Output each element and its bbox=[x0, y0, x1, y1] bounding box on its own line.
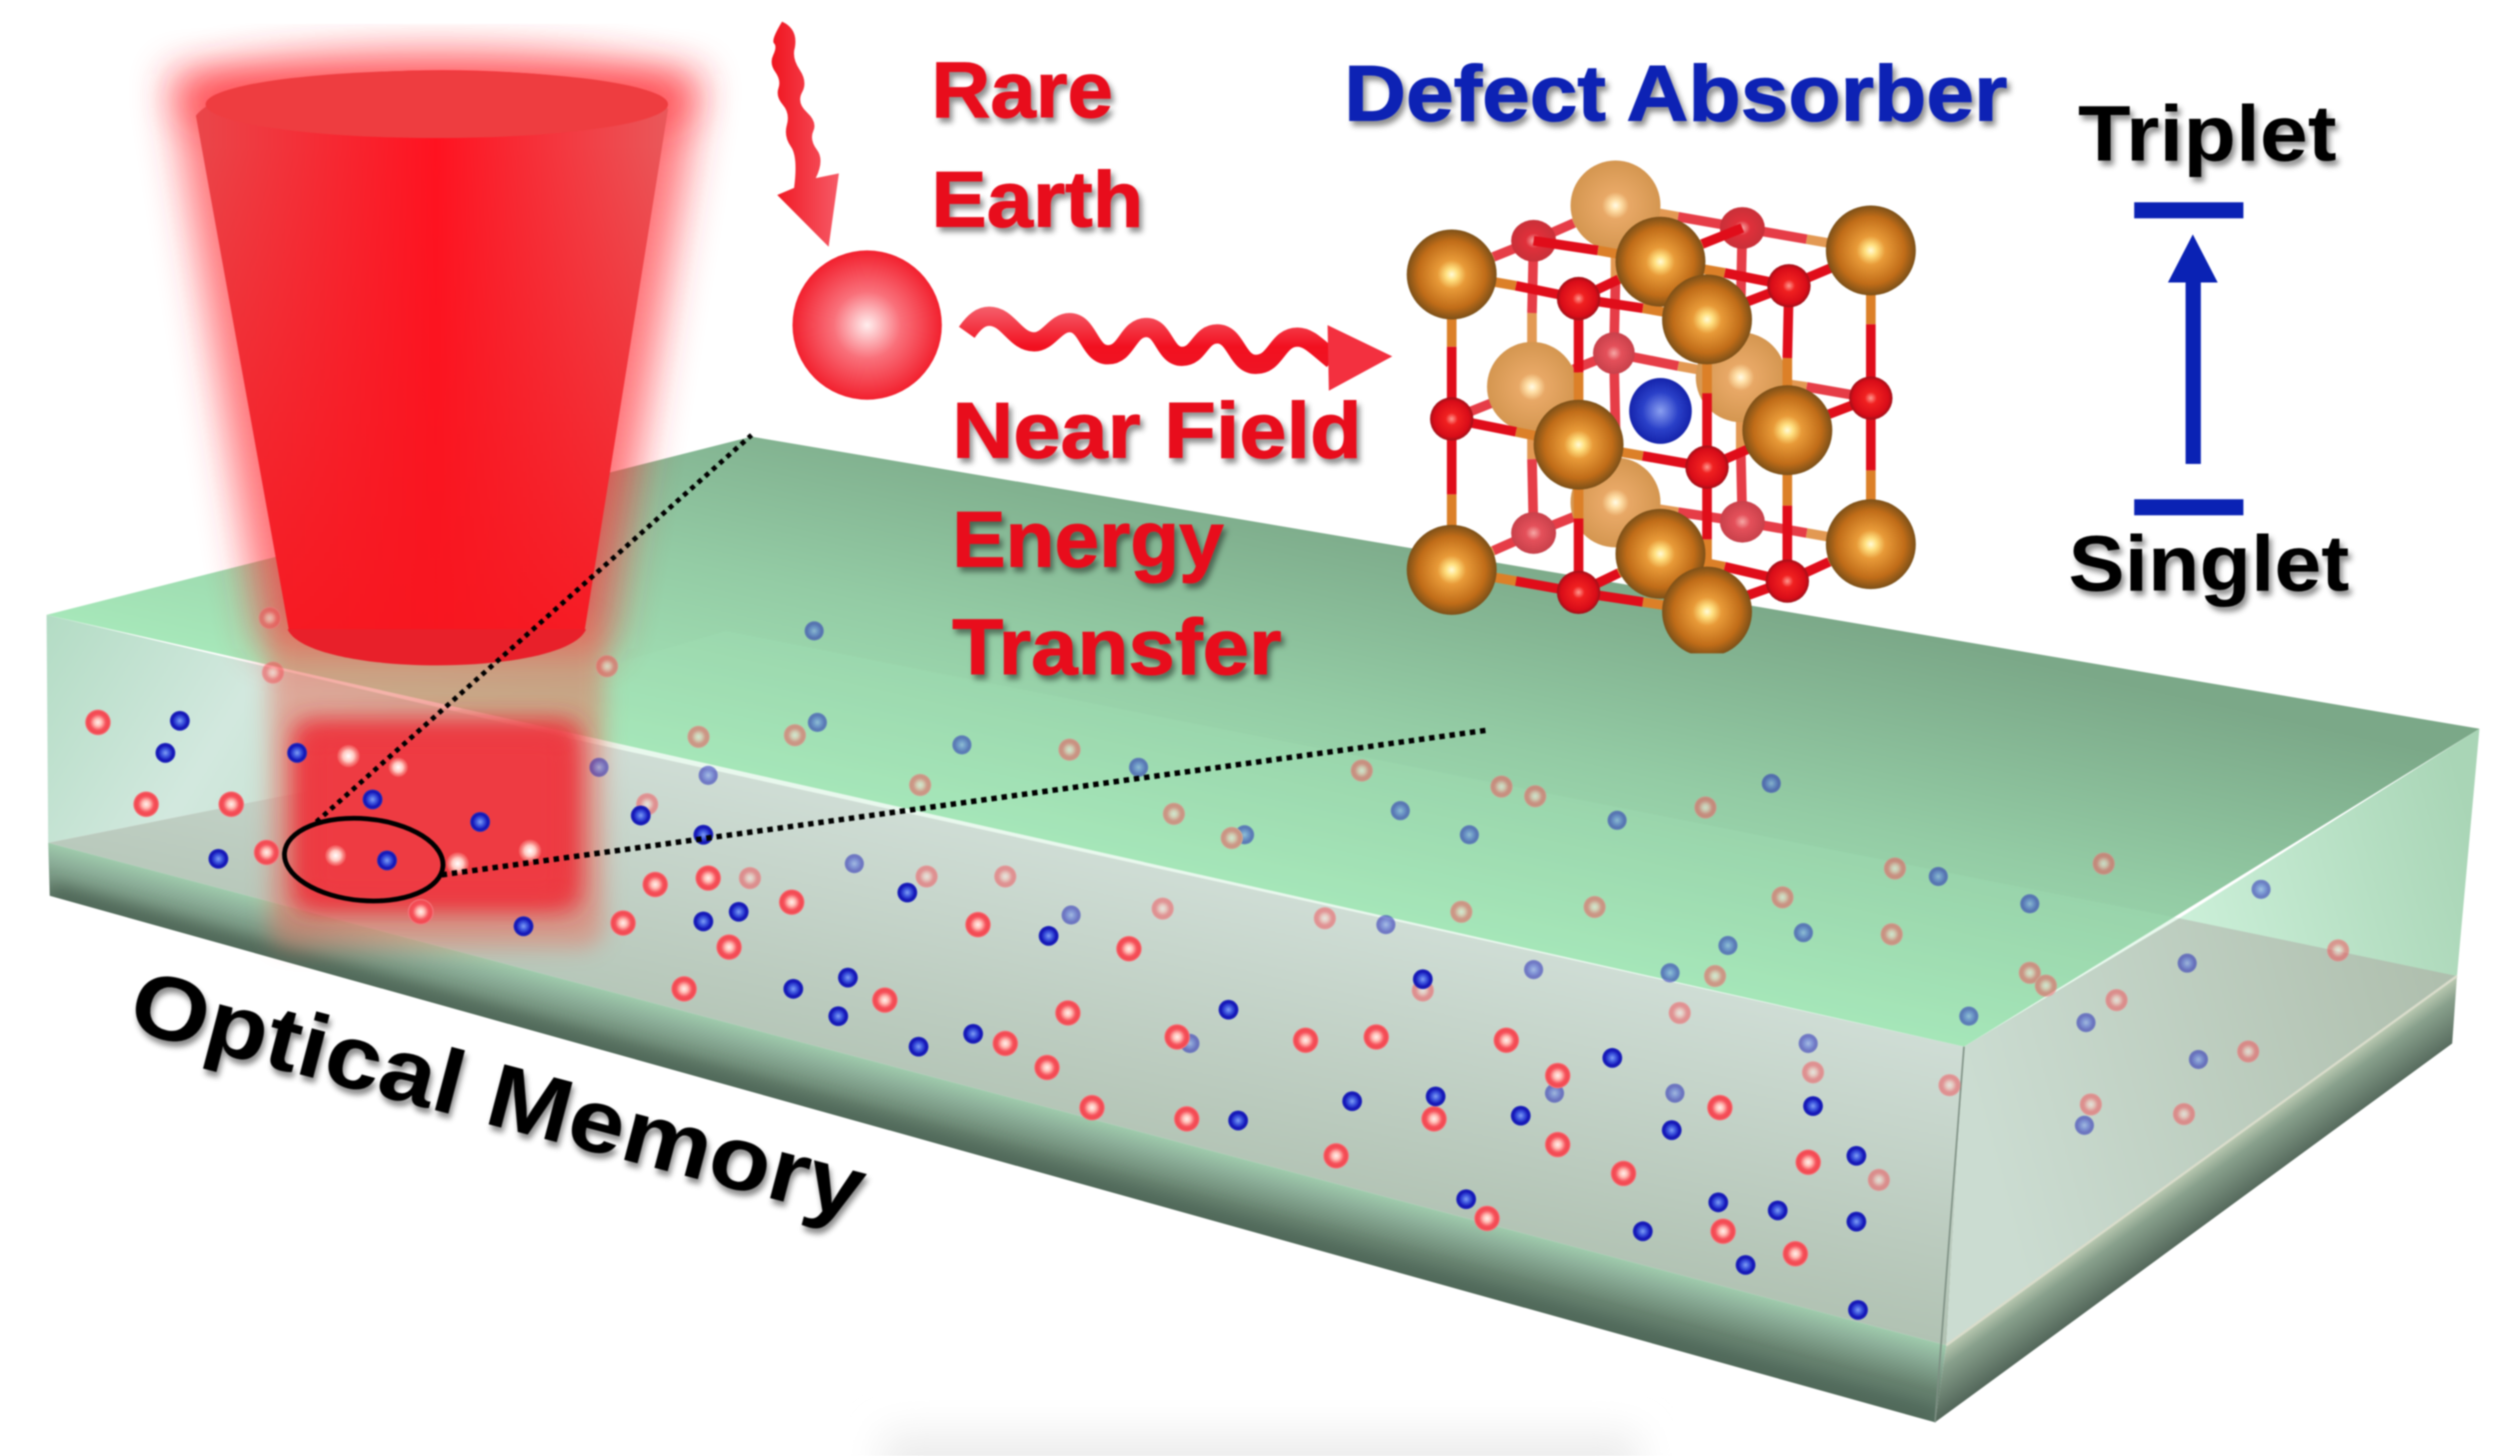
substrate front side bbox=[48, 843, 1946, 1422]
faded red ions bbox=[259, 607, 2349, 1191]
label: Near Field Energy Transfer: Transfer bbox=[952, 603, 1281, 691]
front bonds bbox=[1452, 228, 1871, 612]
label: Singlet: Singlet bbox=[2068, 520, 2349, 608]
icon: blue defect atom bbox=[1629, 378, 1692, 444]
label: Rare Earth: Earth bbox=[931, 155, 1143, 243]
slab front face bbox=[47, 615, 570, 843]
label: Near Field Energy Transfer: Near Field bbox=[952, 387, 1362, 475]
substrate lower shading bbox=[50, 896, 1935, 1422]
particles (front) bbox=[85, 710, 1868, 1320]
slab right face bbox=[1964, 729, 2479, 1047]
energy level diagram bbox=[2068, 90, 2349, 608]
icon: wavy near field arrow bbox=[967, 316, 1392, 391]
faded particles (behind) bbox=[259, 607, 2349, 1191]
zoom callout: ellipse and dotted lines bbox=[281, 435, 1485, 907]
beam cone bbox=[196, 70, 668, 631]
ions inside the laser spot bbox=[325, 745, 541, 875]
label: Near Field Energy Transfer: Energy bbox=[952, 496, 1224, 584]
optical memory slab bbox=[47, 437, 2479, 1422]
beam top opening bbox=[206, 71, 668, 138]
faded blue defects bbox=[589, 621, 2271, 1135]
dotted line to back corner bbox=[316, 435, 752, 822]
bottom floor shadow bbox=[883, 1434, 1638, 1456]
label: Optical Memory: Optical Memory bbox=[120, 952, 876, 1240]
dotted line to right bbox=[442, 730, 1485, 875]
label: Triplet: Triplet bbox=[2078, 90, 2337, 178]
red laser beam bbox=[170, 51, 700, 947]
label: Rare Earth: Rare bbox=[931, 46, 1113, 134]
beam lower solid core bbox=[196, 109, 668, 631]
triplet level bar bbox=[2134, 202, 2243, 218]
arrow: singlet to triplet bbox=[2168, 234, 2218, 464]
front atoms bbox=[1407, 205, 1916, 657]
crystal lattice: defect absorber bbox=[1407, 161, 1916, 657]
beam lower rim bbox=[287, 629, 586, 665]
label: Rare Earth bbox=[931, 46, 1143, 243]
back atoms bbox=[1487, 161, 1786, 554]
interior back plane seen through the top bbox=[281, 631, 2179, 1047]
focal spot in slab bbox=[292, 719, 581, 912]
beam halo through slab bbox=[270, 618, 604, 947]
red rare earth ions bbox=[85, 710, 1821, 1267]
label: Defect Absorber: Defect Absorber bbox=[1344, 49, 2007, 137]
icon: rare earth sphere bbox=[792, 250, 942, 400]
back bonds bbox=[1468, 208, 1852, 556]
singlet level bar bbox=[2134, 499, 2243, 515]
slab top face bbox=[47, 437, 2479, 1047]
blue defect centers bbox=[155, 711, 1868, 1320]
beam glow bbox=[170, 74, 700, 649]
selection ellipse bbox=[281, 812, 446, 907]
icon: wavy excitation arrow bbox=[772, 22, 839, 247]
label: Near Field Energy Transfer bbox=[952, 387, 1362, 691]
substrate right side bbox=[1935, 976, 2457, 1422]
